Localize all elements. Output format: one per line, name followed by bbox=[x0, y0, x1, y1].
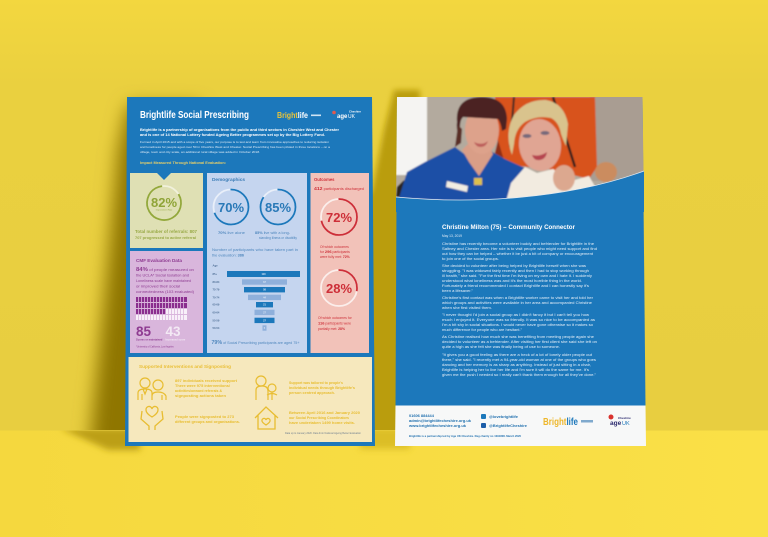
demographics captions: 70% live alone bbox=[218, 231, 245, 235]
85% ring: 85% bbox=[265, 200, 291, 215]
bar chart: age of participants: 65-69 bbox=[212, 303, 220, 307]
panel: outcomes bbox=[310, 173, 369, 353]
stat: 43 bbox=[166, 324, 186, 342]
text: person-centred: Support was tailored to people's bbox=[289, 381, 343, 385]
70% ring: 70% bbox=[218, 200, 244, 215]
icon: hands holding heart bbox=[141, 406, 163, 430]
logo: Age UK: age bbox=[610, 420, 622, 427]
panel: CMF evaluation data: *University of California, Los Angeles bbox=[136, 346, 175, 348]
82% ring bbox=[141, 180, 187, 226]
intro text: village, town and city scale, an additional rural village was added in October 2018. bbox=[140, 150, 260, 154]
72% ring bbox=[321, 199, 357, 235]
logo: Age UK: UK bbox=[622, 421, 630, 427]
panel: demographics: Demographics bbox=[212, 177, 246, 182]
stat: 85: 85 bbox=[136, 324, 152, 339]
bar chart: age of participants: 70-74 bbox=[212, 295, 220, 299]
social media bbox=[481, 414, 527, 428]
70% ring bbox=[214, 190, 248, 224]
contact details: www.brightlifecheshire.org.uk bbox=[408, 423, 467, 428]
heading: impact measured: Impact Measured Through National Evaluation: bbox=[140, 160, 226, 165]
social media: @BrightlifeCheshire bbox=[489, 424, 527, 428]
intro text: Formed in April 2015 and with a scope of five years, our purpose is to test and learn from innovative approaches to reducing isolation bbox=[140, 140, 329, 144]
panel: outcomes: 412 participants discharged bbox=[314, 186, 364, 191]
age summary: 79% of Social Prescribing participants are aged 75+ bbox=[212, 340, 300, 346]
logo: Age UK: Cheshire bbox=[618, 416, 631, 420]
72% caption bbox=[320, 245, 350, 259]
28% ring bbox=[321, 270, 357, 306]
page shadows on wall and floor bbox=[60, 90, 420, 460]
article body: to join one of the social groups. bbox=[442, 257, 499, 261]
text: person-centred: person centred approach. bbox=[289, 391, 335, 395]
article title: Christine Milton (75) – Community Connector bbox=[442, 224, 576, 231]
bar chart: age of participants: 58 bbox=[263, 289, 266, 292]
icon: older couple bbox=[138, 378, 166, 400]
28% caption bbox=[318, 316, 353, 331]
panel: CMF evaluation data: Loneliness scale have maintained bbox=[136, 279, 191, 283]
data source note: Data up to January 2020. Data from National Ageing Better Evaluation bbox=[285, 432, 362, 435]
article body: ill health," she said. "For the first time I'm living on my own and I hate it. I suddenly bbox=[442, 274, 592, 278]
article body: quite a high as she felt she was finally being of use to someone. bbox=[442, 345, 560, 349]
28% caption: 116 participants were bbox=[318, 320, 351, 326]
text: individuals supported: signposting actions taken bbox=[175, 394, 226, 398]
article body: "It gives you a good feeling as there are a heck of a lot of lonely older people out bbox=[442, 353, 592, 357]
text: signposted bbox=[175, 415, 240, 424]
photo: carer and older woman bbox=[396, 97, 644, 200]
text: signposted: People were signposted to 273 bbox=[175, 415, 234, 419]
footer bbox=[395, 406, 646, 446]
text: person-centred bbox=[289, 381, 355, 395]
bar chart: age of participants bbox=[212, 264, 300, 331]
bar chart: age of participants: 50-54 bbox=[212, 326, 220, 330]
icon: carer and person bbox=[256, 376, 277, 400]
text: individuals supported: activities/onward referrals & bbox=[175, 389, 222, 393]
bar chart: age of participants: 5 bbox=[264, 327, 266, 330]
intro text: and is one of 14 National Lottery funded Ageing Better programmes set up by the Big Lottery Fund. bbox=[140, 132, 325, 137]
article body: Fortunately a friend recommended I contact Brightlife and I can honestly say it's bbox=[442, 284, 589, 288]
panel: supported interventions and signposting bbox=[128, 357, 372, 442]
28% ring: 28% bbox=[326, 281, 352, 296]
panel: CMF evaluation data: CMF Evaluation Data bbox=[136, 258, 183, 263]
text: signposted: different groups and organisations. bbox=[175, 420, 240, 424]
bar chart: age of participants: 55-59 bbox=[212, 318, 220, 322]
article body: much difference for people who are hesitant." bbox=[442, 328, 523, 332]
article body: "I never thought I'd join a social group as I didn't fancy it but I can't tell you how bbox=[442, 313, 589, 317]
stat: 85 bbox=[136, 324, 163, 342]
bar chart: age of participants: 85+ bbox=[212, 272, 217, 276]
article body: out how they can be helped – whether it be just a bit of company or encouragement bbox=[442, 252, 593, 256]
article body: Christine has recently become a volunteer buddy and befriender for Brightlife in the bbox=[442, 242, 594, 246]
text: home visits bbox=[289, 411, 360, 425]
referrals text: 707 progressed to active referral bbox=[135, 236, 196, 240]
stat: 43: Increased score bbox=[166, 338, 186, 342]
85% ring bbox=[260, 190, 296, 224]
logo: Age UK bbox=[608, 414, 631, 427]
bar chart: age of participants: 60-64 bbox=[212, 310, 220, 314]
28% caption: partially met: 28% bbox=[318, 327, 345, 331]
article date: May 13, 2019 bbox=[442, 234, 462, 238]
article body: when she first visited them. bbox=[442, 306, 492, 310]
panel: demographics bbox=[207, 173, 307, 353]
icon: house with heart bbox=[255, 407, 278, 429]
text: home visits: Between April 2016 and January 2020 bbox=[289, 411, 360, 415]
article body: struggling. "I was widowed fairly recently and then I had to stop working through bbox=[442, 269, 589, 273]
curved banner edge bbox=[396, 171, 644, 212]
article body: there," she said. "I recently met a 94-year-old woman at one of the groups who goes bbox=[442, 358, 596, 362]
text: individuals supported: There were 975 interventions/ bbox=[175, 384, 230, 388]
left page: infographic bbox=[125, 97, 375, 446]
bar chart: age of participants: 80-84 bbox=[212, 280, 220, 284]
article body: given me the push I needed so I really can't thank them enough for all they've done." bbox=[442, 373, 597, 377]
72% caption: Of which outcomes bbox=[320, 245, 349, 249]
demographics captions bbox=[212, 231, 298, 258]
demographics captions: 85% live with a long- bbox=[255, 231, 291, 235]
72% caption: for 296 participants bbox=[320, 249, 350, 254]
text: individuals supported bbox=[175, 379, 238, 398]
contact details bbox=[408, 413, 472, 428]
logo: Age UK bbox=[332, 110, 361, 120]
bar chart: age of participants: 44 bbox=[263, 296, 266, 299]
article body: Christine's first contact was when a Brightlife worker came to visit her and told her bbox=[442, 296, 594, 300]
footer legal line: Brightlife is a partnership led by Age UK Cheshire. Reg charity no 1091808. March 2020 bbox=[409, 434, 521, 438]
panel: CMF evaluation data: or improved their social bbox=[136, 284, 180, 288]
article body: much I enjoyed it. Everyone was so friendly. It was so nice to be accompanied as bbox=[442, 318, 595, 322]
bar chart: age of participants: 27 bbox=[263, 319, 266, 322]
text: home visits: our Social Prescribing Coordinators bbox=[289, 416, 349, 420]
title: Brightlife Social Prescribing bbox=[140, 110, 249, 121]
text: individuals supported: 897 individuals received support bbox=[175, 379, 238, 383]
logo: Brightlife: Brightlife bbox=[277, 111, 308, 120]
72% caption: were fully met: 72% bbox=[320, 255, 350, 259]
82% ring: Improvement Rate bbox=[156, 208, 173, 212]
panel: CMF evaluation data bbox=[130, 251, 203, 353]
article body: understood what loneliness was and it's the most horrible thing in the world. bbox=[442, 279, 582, 283]
intro text: and loneliness for people aged over 50 in Cheshire West and Chester. Social Prescribing has been piloted in three locations – on a bbox=[140, 145, 330, 149]
panel: CMF evaluation data: 84% of people measured on bbox=[136, 267, 194, 273]
logo: Age UK: age bbox=[337, 114, 348, 120]
text: person-centred: individual needs through Brightlife's bbox=[289, 386, 355, 390]
82% ring: 82% bbox=[151, 195, 177, 210]
article body: As Christine realised how much she was benefiting from meeting people again she bbox=[442, 335, 594, 339]
intro text bbox=[140, 127, 339, 154]
bar chart: age of participants: 21 bbox=[263, 304, 266, 307]
article body: decided to volunteer as a befriender. After visiting her first client she said she left on bbox=[442, 340, 597, 344]
demographics captions: Number of participants who have taken part in bbox=[212, 248, 298, 252]
panel: supported interventions and signposting: Supported Interventions and Signposting bbox=[139, 364, 231, 369]
bar chart: age of participants: 67 bbox=[263, 281, 266, 284]
article body: Saltney and Chester area. Her role is to visit people who might need support and find bbox=[442, 247, 597, 251]
text: home visits: have undertaken 1499 home visits. bbox=[289, 421, 355, 425]
contact details: 01606 884444 bbox=[409, 413, 435, 418]
bar chart: age of participants: 110 bbox=[261, 273, 266, 276]
logo: Age UK: UK bbox=[348, 114, 356, 120]
article body bbox=[442, 242, 597, 377]
72% ring: 72% bbox=[326, 210, 352, 225]
intro text: Brightlife is a partnership of organisations from the public and third sectors in Cheshire West and Chester bbox=[140, 127, 339, 132]
article body: She decided to volunteer after being helped by Brightlife herself when she was bbox=[442, 264, 586, 268]
stat: 43: 43 bbox=[166, 324, 181, 339]
contact details: admin@brightlifecheshire.org.uk bbox=[409, 418, 472, 423]
referrals text: Total number of referrals: 807 bbox=[135, 229, 198, 234]
article body: dancing and her memory is as sharp as anything. Instead of just sitting in a chair, bbox=[442, 363, 591, 367]
article body: which groups and activities were available in her area and accompanied Christine bbox=[442, 301, 592, 305]
panel: CMF evaluation data: connectedness (103 evaluated) bbox=[136, 290, 194, 294]
bar chart: age of participants: Age bbox=[212, 264, 218, 268]
demographics captions: standing illness or disability bbox=[259, 236, 297, 240]
panel: CMF evaluation data: the UCLA* Social Isolation and bbox=[136, 274, 189, 278]
demographics captions: the evaluation: 386 bbox=[212, 254, 244, 258]
bar chart: age of participants: 27 bbox=[263, 311, 266, 314]
article body: been a lifesaver." bbox=[442, 289, 474, 293]
panel: referrals bbox=[130, 173, 203, 248]
panel: outcomes: Outcomes bbox=[314, 177, 335, 182]
article body: Brightlife is helping her to live her life and I'm sure it will do the same for me. It's bbox=[442, 368, 589, 372]
logo: Brightlife: Brightlife bbox=[543, 417, 578, 428]
article body: I'm a bit shy in social situations. I would never have gone otherwise so it makes so bbox=[442, 323, 593, 327]
social media: @lovebrightlife bbox=[489, 415, 518, 419]
pictogram: people bbox=[136, 297, 187, 320]
referrals text bbox=[135, 229, 198, 240]
bar chart: age of participants: 75-79 bbox=[212, 288, 220, 292]
right page: case study bbox=[395, 95, 646, 446]
28% caption: Of which outcomes for bbox=[318, 316, 353, 320]
stat: 85: Scores or maintained bbox=[136, 338, 163, 342]
logo: Age UK: Cheshire bbox=[349, 110, 361, 114]
